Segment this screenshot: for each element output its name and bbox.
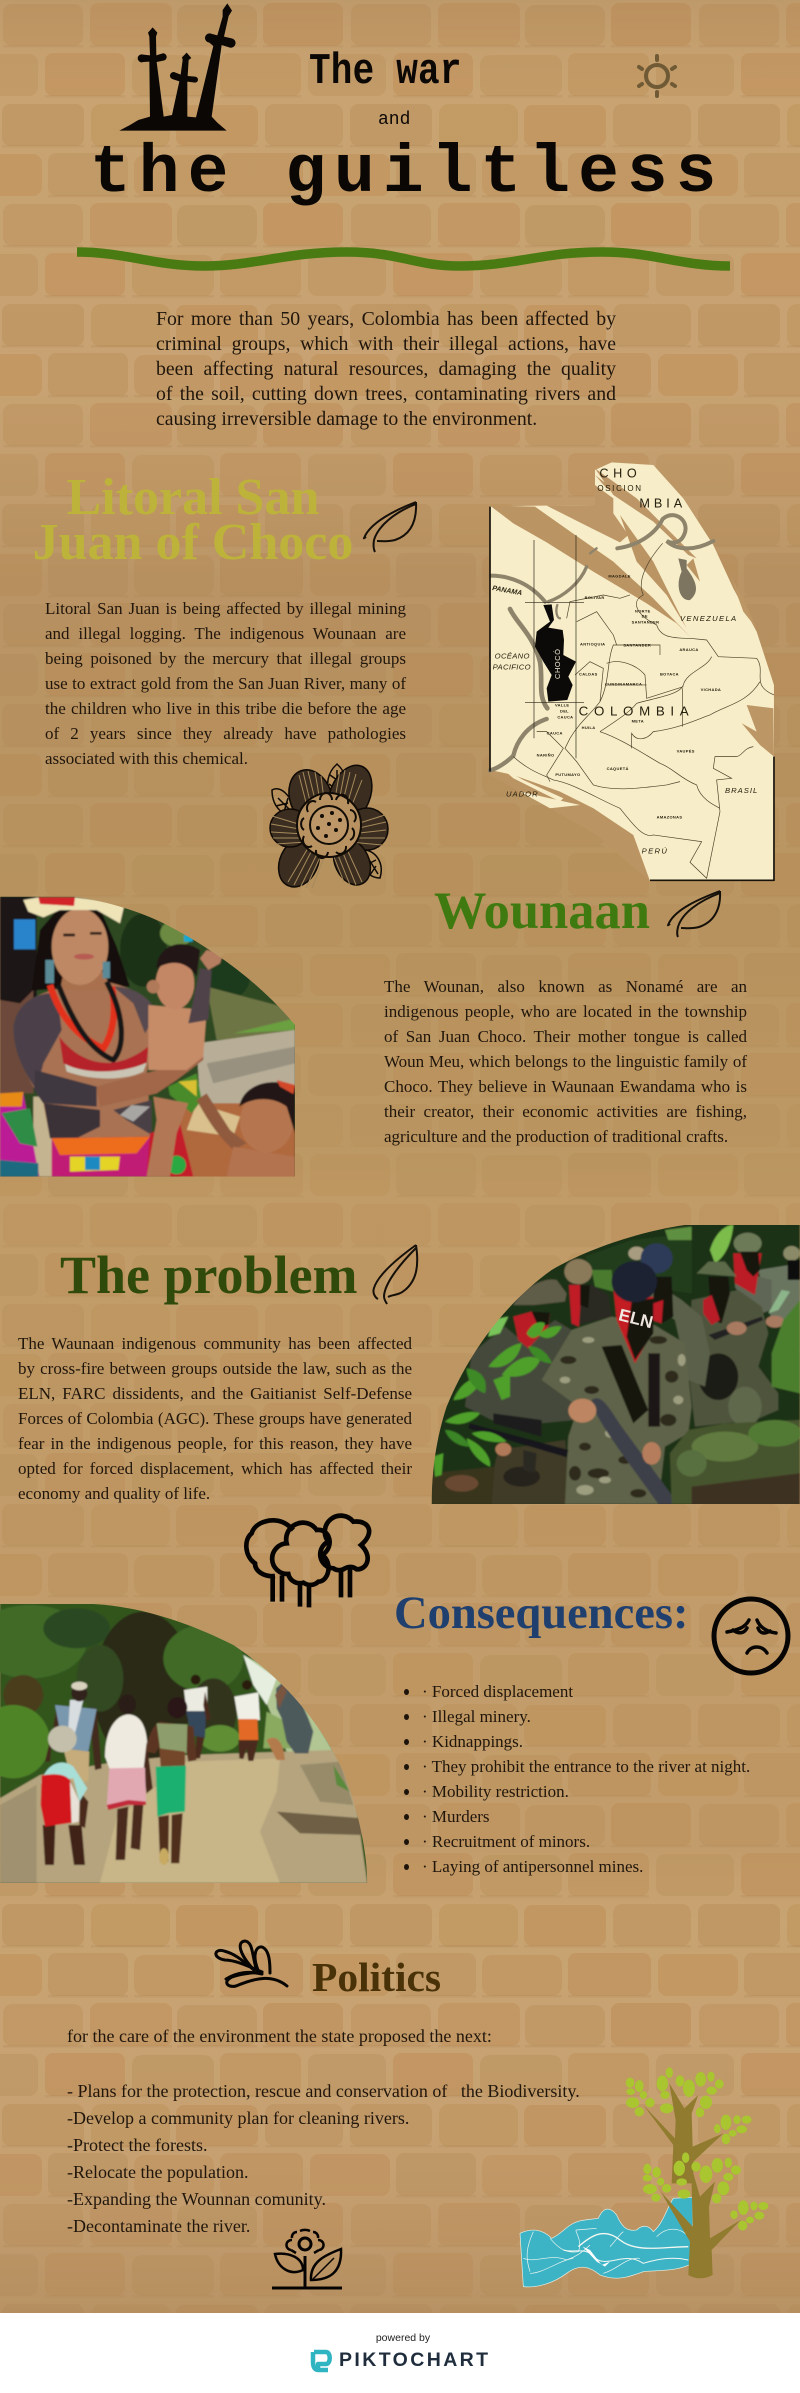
text: Litoral San Juan: Litoral San Juan is being affected by illegal mining xyxy=(45,599,406,618)
text: Litoral San Juan: and illegal logging. The indigenous Wounaan are xyxy=(45,624,406,643)
icon: sad face xyxy=(714,1599,788,1673)
text: Wounaan people: indigenous people, who are located in the township xyxy=(384,1002,747,1021)
heading: Wounaan: Wounaan xyxy=(434,882,650,940)
text: Wounaan people: Woun Meu, which belongs to the linguistic family of xyxy=(384,1052,747,1071)
map of Colombia with brushed edges: COLOMBIA xyxy=(579,704,694,719)
map of Colombia with brushed edges: PERÚ xyxy=(642,847,668,856)
text: Politics intro: for the care of the environment the state proposed the next: xyxy=(67,2026,492,2046)
map of Colombia with brushed edges: CHOCÓ xyxy=(553,648,562,679)
text: Wounaan people: of San Juan Choco. Their mother tongue is called xyxy=(384,1027,747,1046)
map of Colombia with brushed edges: NARIÑO xyxy=(537,753,554,758)
map of Colombia with brushed edges: UADOR xyxy=(506,789,539,798)
text: The problem: by cross-fire between groups outside the law, such as the xyxy=(18,1359,412,1378)
map of Colombia with brushed edges: BRASIL xyxy=(725,786,758,795)
map of Colombia with brushed edges: DE xyxy=(642,614,648,619)
text: The problem: economy and quality of life. xyxy=(18,1484,210,1503)
text: Litoral San Juan: of 2 years since they already have pathologies xyxy=(45,724,406,743)
title: the guiltless: the guiltless xyxy=(90,135,724,212)
text: The problem: ELN, FARC dissidents, and the Gaitianist Self-Defense xyxy=(18,1384,412,1403)
text: Wounaan people: The Wounan, also known as Nonamé are an xyxy=(384,977,747,996)
list: consequences: · Laying of antipersonnel mines. xyxy=(422,1857,643,1876)
map of Colombia with brushed edges: PUTUMAYO xyxy=(555,772,580,777)
icon: flower sprout xyxy=(272,2230,342,2288)
map of Colombia with brushed edges: NORTE xyxy=(635,608,651,613)
map of Colombia with brushed edges: MAGDALE xyxy=(608,574,631,579)
map of Colombia with brushed edges: PANAMA xyxy=(492,585,523,597)
map of Colombia with brushed edges: SANTANDER xyxy=(632,619,659,624)
heading: Consequences: Consequences: xyxy=(394,1588,689,1639)
map of Colombia with brushed edges: CHO xyxy=(599,467,641,481)
map of Colombia with brushed edges: CUNDINAMARCA xyxy=(605,682,642,687)
text: The problem: Forces of Colombia (AGC). These groups have generated xyxy=(18,1409,412,1428)
ELN lettering on scarf: ELN xyxy=(617,1304,655,1332)
text: Wounaan people: Choco. They believe in Waunaan Ewandama who is xyxy=(384,1077,747,1096)
wavy green divider xyxy=(77,252,730,266)
map of Colombia with brushed edges: CAQUETÁ xyxy=(607,766,629,771)
list: state proposals: - Plans for the protection, rescue and conservation of the Biodiversity. -Develop a community plan for cleaning rivers. -Protect the forests. -Relocate the population. -Expanding the Wounnan comunity. -Decontaminate the river. xyxy=(67,2081,580,2236)
map of Colombia with brushed edges: OCÉANO xyxy=(495,651,530,660)
map of Colombia with brushed edges: PACIFICO xyxy=(493,662,531,671)
intro text: of the soil, cutting down trees, contaminating rivers and xyxy=(156,383,616,405)
heading: Politics: Politics xyxy=(312,1954,441,2000)
heading: Litoral San Juan of Choco xyxy=(33,469,353,571)
map of Colombia with brushed edges: MBIA xyxy=(639,497,686,511)
map of Colombia with brushed edges: DEL xyxy=(560,708,569,713)
map of Colombia with brushed edges: VICHADA xyxy=(701,687,721,692)
list: consequences: · Murders xyxy=(422,1807,490,1826)
map of Colombia with brushed edges: VAUPÉS xyxy=(677,749,695,754)
map of Colombia with brushed edges: CALDAS xyxy=(579,672,598,677)
text: The problem: opted for forced displacement, which has affected their xyxy=(18,1459,412,1478)
footer: Piktochart wordmark: PIKTOCHART xyxy=(339,2349,490,2371)
map of Colombia with brushed edges: VALLE xyxy=(555,703,569,708)
intro text: causing irreversible damage to the environment. xyxy=(156,408,537,430)
icon: leafy branch xyxy=(216,1941,287,1986)
text: Wounaan people: agriculture and the production of traditional crafts. xyxy=(384,1127,728,1146)
heading: Litoral San Juan of Choco: Litoral San xyxy=(67,469,319,526)
text: The problem: The Waunaan indigenous community has been affected xyxy=(18,1334,412,1353)
heading: The problem: The problem xyxy=(60,1245,358,1305)
photo: Wounaan woman with children xyxy=(0,890,300,1183)
illustration: tree and polluted river xyxy=(520,2067,768,2287)
list: consequences: · Mobility restriction. xyxy=(422,1782,569,1801)
icon: Piktochart logo mark xyxy=(313,2352,330,2372)
map of Colombia with brushed edges: VENEZUELA xyxy=(680,614,738,623)
photo: displaced people walking on a dirt road xyxy=(0,1585,370,1885)
text: Litoral San Juan: the children who live in this tribe die before the age xyxy=(45,699,406,718)
list: consequences: · Kidnappings. xyxy=(422,1732,523,1751)
intro text xyxy=(156,308,616,430)
text: Wounaan people xyxy=(384,977,748,1146)
list: consequences: · Forced displacement xyxy=(422,1682,573,1701)
footer: powered by: powered by xyxy=(376,2332,430,2344)
list: consequences xyxy=(404,1682,750,1876)
icon: sun xyxy=(639,56,675,96)
icon: leaf beside The problem heading xyxy=(373,1245,417,1304)
intro text: been affecting natural resources, damaging the quality xyxy=(156,358,616,380)
map of Colombia with brushed edges: HUILA xyxy=(582,725,596,730)
text: Litoral San Juan: associated with this chemical. xyxy=(45,749,248,768)
text: The problem: fear in the indigenous people, for this reason, they have xyxy=(18,1434,412,1453)
list: consequences: · They prohibit the entrance to the river at night. xyxy=(422,1757,750,1776)
map of Colombia with brushed edges xyxy=(490,462,774,881)
map of Colombia with brushed edges: CAUCA xyxy=(547,730,563,735)
intro text: For more than 50 years, Colombia has been affected by xyxy=(156,308,616,330)
text: Wounaan people: their creator, their economic activities are fishing, xyxy=(384,1102,747,1121)
title: and: and xyxy=(378,110,410,130)
list: consequences: · Recruitment of minors. xyxy=(422,1832,590,1851)
map of Colombia with brushed edges: OSICION xyxy=(597,484,643,493)
icon: leaf beside Litoral heading xyxy=(364,502,416,552)
photo: armed ELN group xyxy=(425,1220,800,1507)
map of Colombia with brushed edges: BOLIVAR xyxy=(585,595,605,600)
text: The problem xyxy=(18,1334,412,1503)
text: Litoral San Juan xyxy=(45,599,406,768)
heading: Litoral San Juan of Choco: Juan of Choco xyxy=(33,514,353,571)
text: Litoral San Juan: use to extract gold from the San Juan River, many of xyxy=(45,674,406,693)
icon: leaf beside Wounaan heading xyxy=(668,891,720,937)
map of Colombia with brushed edges: ANTIOQUIA xyxy=(580,642,605,647)
icon: ornamental flower xyxy=(270,759,388,894)
text: Litoral San Juan: being poisoned by the mercury that illegal groups xyxy=(45,649,406,668)
footer: white band xyxy=(0,2313,800,2393)
map of Colombia with brushed edges: ARAUCA xyxy=(679,647,699,652)
map of Colombia with brushed edges: AMAZONAS xyxy=(657,814,682,819)
map of Colombia with brushed edges: META xyxy=(632,719,644,724)
icon: three trees xyxy=(246,1516,369,1607)
title: The war: The war xyxy=(309,47,462,96)
icon: three swords xyxy=(119,3,236,131)
list: consequences: · Illegal minery. xyxy=(422,1707,531,1726)
map of Colombia with brushed edges: SANTANDER xyxy=(623,643,651,648)
map of Colombia with brushed edges: CAUCA xyxy=(557,714,573,719)
intro text: criminal groups, which with their illegal actions, have xyxy=(156,333,616,355)
map of Colombia with brushed edges: BOYACA xyxy=(660,672,679,677)
